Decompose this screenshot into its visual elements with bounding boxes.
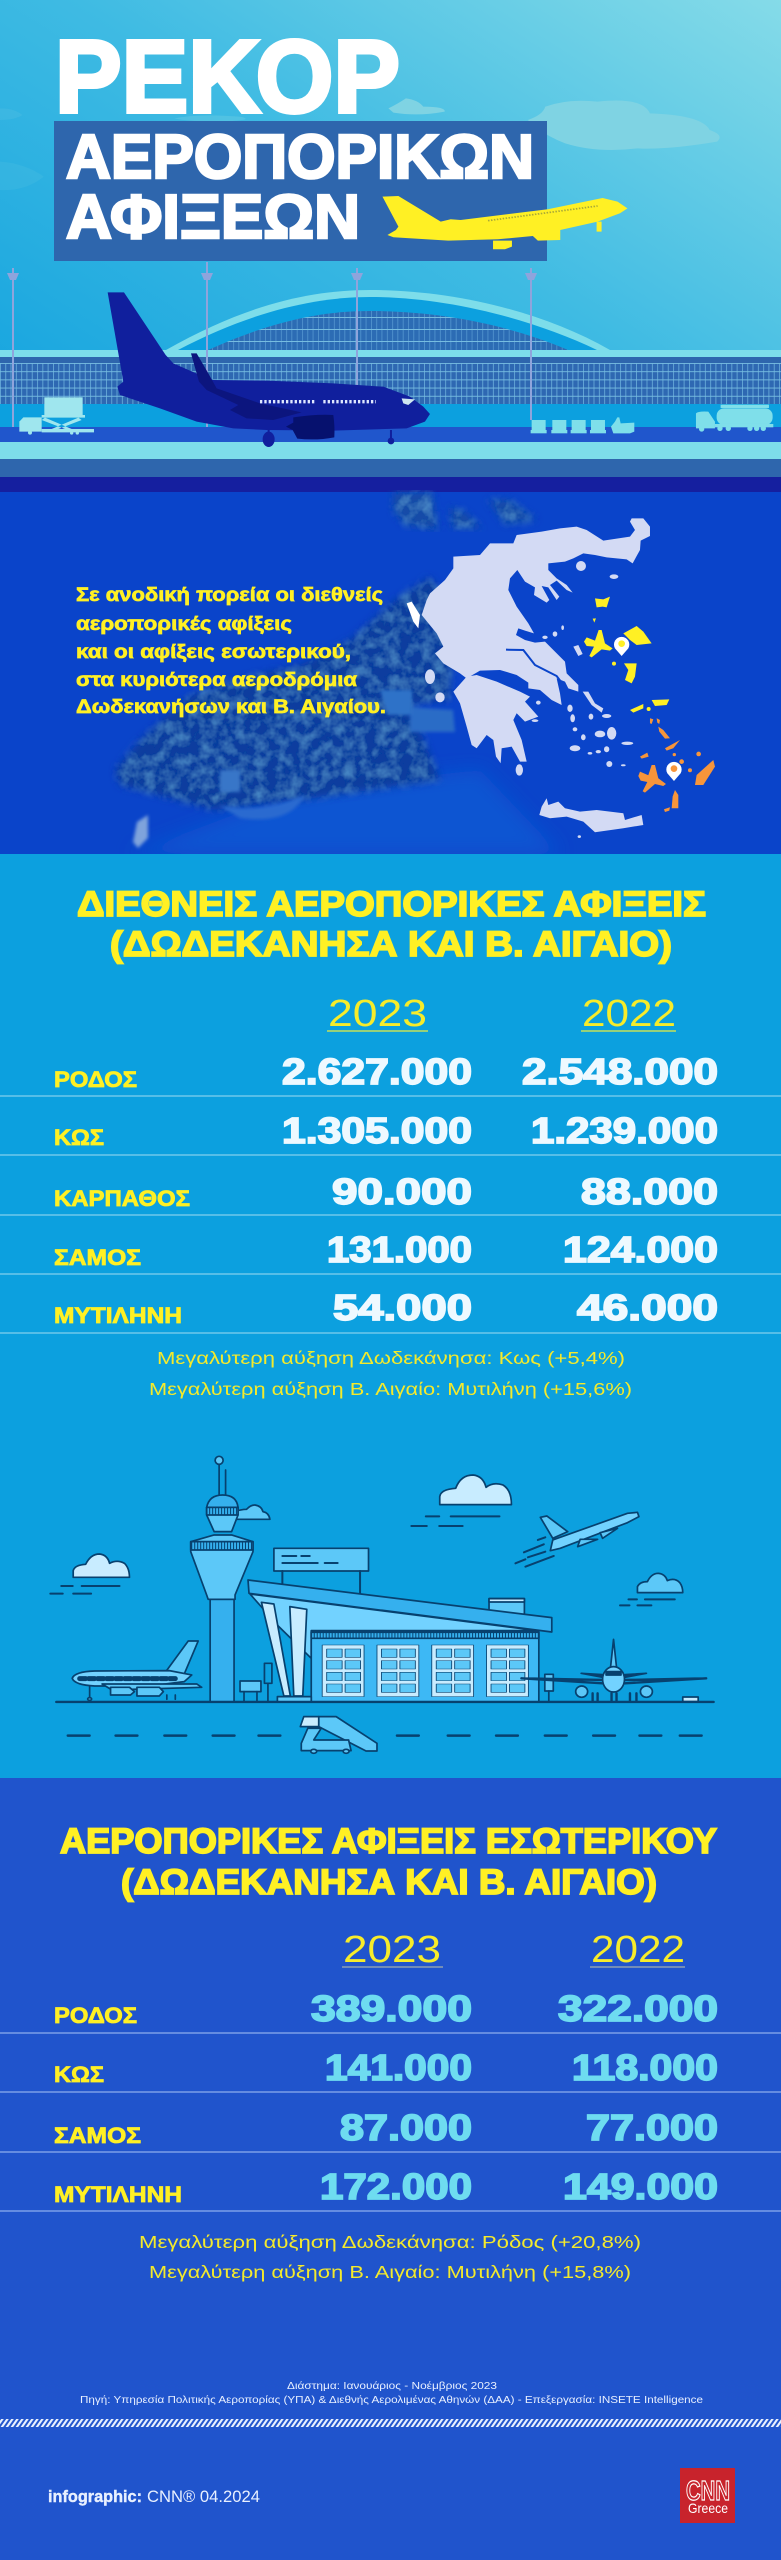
heading: international arrivals [77, 885, 706, 964]
panel: map section [0, 492, 781, 854]
map: Greece mainland and islands [407, 518, 650, 838]
photo: island backdrop [115, 492, 560, 854]
column headers: 2023 [343, 1929, 441, 1971]
icon: control tower [191, 1456, 253, 1702]
icon: parked plane, front view [521, 1639, 706, 1702]
row: Mytilene: 172.000 [320, 2166, 472, 2207]
row: Mytilene: ΜΥΤΙΛΗΝΗ [54, 1303, 182, 1328]
icon: clouds [50, 1475, 683, 1605]
illustration: terminal arch [166, 290, 610, 350]
row: Samos: 77.000 [586, 2107, 718, 2148]
column headers [327, 993, 676, 1035]
row: Kos [54, 1110, 718, 1151]
row: Samos: 87.000 [340, 2107, 472, 2148]
row: Kos: ΚΩΣ [54, 2062, 104, 2087]
text: infographic credit: CNN® 04.2024 [147, 2487, 260, 2506]
text: map intro: Σε ανοδική πορεία οι διεθνείς [76, 584, 383, 606]
row: Kos: 1.239.000 [531, 1110, 718, 1151]
text: map intro: αεροπορικές αφίξεις [76, 613, 292, 635]
heading: domestic arrivals: (ΔΩΔΕΚΑΝΗΣΑ ΚΑΙ Β. ΑΙΓΑΙΟ) [121, 1863, 657, 1902]
row: Kos: 141.000 [325, 2047, 472, 2088]
column headers: 2022 [591, 1929, 685, 1971]
notes: largest increases: Μεγαλύτερη αύξηση Β. Αιγαίο: Μυτιλήνη (+15,6%) [149, 1379, 632, 1399]
row: Rhodes: 2.627.000 [282, 1051, 472, 1092]
heading: international arrivals: (ΔΩΔΕΚΑΝΗΣΑ ΚΑΙ Β. ΑΙΓΑΙΟ) [110, 925, 672, 964]
row: Kos: 118.000 [572, 2047, 718, 2088]
icon: fuel truck [696, 405, 773, 432]
band: apron stripes [0, 427, 781, 492]
title box [54, 121, 547, 261]
logo: CNN Greece [680, 2468, 735, 2523]
icon: passenger stairs [300, 1717, 377, 1753]
illustration: airport line art [50, 1456, 714, 1753]
row: Samos: 131.000 [327, 1229, 472, 1270]
row: Kos: 1.305.000 [282, 1110, 472, 1151]
text: infographic credit: infographic: [48, 2487, 142, 2506]
row: Rhodes: ΡΟΔΟΣ [54, 1067, 137, 1092]
icon: yellow airliner over title box [382, 196, 627, 249]
notes: largest increases [139, 2232, 641, 2282]
ground and runway markings [56, 1702, 714, 1736]
text: map intro: στα κυριότερα αεροδρόμια [76, 669, 357, 691]
heading: domestic arrivals [60, 1822, 717, 1902]
illustration: terminal facade [0, 350, 781, 428]
panel: hero airport scene [0, 0, 781, 492]
row: Karpathos: 88.000 [581, 1171, 718, 1212]
row dividers [0, 2033, 781, 2211]
row: Rhodes: 389.000 [311, 1988, 472, 2029]
panel: international arrivals table [0, 854, 781, 1778]
notes: largest increases: Μεγαλύτερη αύξηση Δωδεκάνησα: Κως (+5,4%) [157, 1348, 625, 1368]
row: Rhodes: 322.000 [558, 1988, 718, 2029]
row: Mytilene: 149.000 [563, 2166, 718, 2207]
icon: orange plane marker [638, 765, 666, 793]
row: Mytilene: ΜΥΤΙΛΗΝΗ [54, 2182, 182, 2207]
notes: largest increases: Μεγαλύτερη αύξηση Β. Αιγαίο: Μυτιλήνη (+15,8%) [149, 2262, 631, 2282]
text: period and source [80, 2380, 703, 2406]
text: infographic credit [48, 2487, 260, 2506]
icon: parked plane, side view [72, 1641, 202, 1700]
row: Kos: ΚΩΣ [54, 1125, 104, 1150]
text: period and source: Πηγή: Υπηρεσία Πολιτικής Αεροπορίας (ΥΠΑ) & Διεθνής Αερολιμένας Αθηνών (ΔΑΑ) - Επεξεργασία: INSETE Intelligence [80, 2394, 703, 2406]
row: Rhodes: ΡΟΔΟΣ [54, 2003, 137, 2028]
icon: yellow plane marker [584, 630, 613, 657]
text: period and source: Διάστημα: Ιανουάριος - Νοέμβριος 2023 [287, 2380, 497, 2392]
illustration: clouds [0, 98, 720, 190]
row: Karpathos: 90.000 [332, 1171, 472, 1212]
row: Mytilene [54, 1287, 718, 1328]
row: Karpathos: ΚΑΡΠΑΘΟΣ [54, 1186, 190, 1211]
logo: CNN Greece: CNN [686, 2475, 730, 2506]
row: Rhodes [54, 1988, 718, 2029]
title: second line: ΑΕΡΟΠΟΡΙΚΩΝ [66, 123, 534, 192]
row: Rhodes: 2.548.000 [522, 1051, 718, 1092]
icon: departing plane [515, 1512, 639, 1567]
map: North Aegean islands in yellow [593, 597, 669, 713]
column headers: 2023 [328, 993, 427, 1035]
column headers: 2022 [582, 993, 676, 1035]
text: map intro: και οι αφίξεις εσωτερικού, [76, 641, 351, 663]
illustration: light poles [7, 262, 537, 428]
notes: largest increases: Μεγαλύτερη αύξηση Δωδεκάνησα: Ρόδος (+20,8%) [139, 2232, 641, 2252]
notes: largest increases [149, 1348, 632, 1399]
row: Samos: ΣΑΜΟΣ [54, 1245, 141, 1270]
icon: white pin north Aegean [614, 637, 629, 656]
logo: CNN Greece: Greece [688, 2500, 728, 2516]
icon: cargo lift [19, 397, 94, 435]
text: map intro [76, 584, 386, 718]
row: Rhodes [54, 1051, 718, 1092]
row: Samos [54, 2107, 718, 2148]
column headers [342, 1929, 685, 1971]
icon: baggage carts [531, 417, 634, 433]
row: Samos [54, 1229, 718, 1270]
icon: blue airliner [108, 292, 430, 447]
icon: white pin Dodecanese [666, 762, 682, 781]
heading: international arrivals: ΔΙΕΘΝΕΙΣ ΑΕΡΟΠΟΡΙΚΕΣ ΑΦΙΞΕΙΣ [77, 885, 706, 924]
text: map intro: Δωδεκανήσων και Β. Αιγαίου. [76, 696, 386, 718]
row: Kos [54, 2047, 718, 2088]
row: Mytilene [54, 2166, 718, 2207]
icon: terminal building [240, 1548, 553, 1702]
row: Samos: 124.000 [563, 1229, 718, 1270]
row: Samos: ΣΑΜΟΣ [54, 2123, 141, 2148]
row dividers [0, 1096, 781, 1333]
panel: domestic arrivals table [0, 1778, 781, 2560]
row: Mytilene: 54.000 [333, 1287, 472, 1328]
row: Mytilene: 46.000 [577, 1287, 718, 1328]
heading: domestic arrivals: ΑΕΡΟΠΟΡΙΚΕΣ ΑΦΙΞΕΙΣ ΕΣΩΤΕΡΙΚΟΥ [60, 1822, 717, 1861]
row: Karpathos [54, 1171, 718, 1212]
title: third line: ΑΦΙΞΕΩΝ [66, 183, 360, 252]
title: main word: ΡΕΚΟΡ [55, 19, 400, 134]
map: Dodecanese islands in orange [640, 718, 715, 812]
